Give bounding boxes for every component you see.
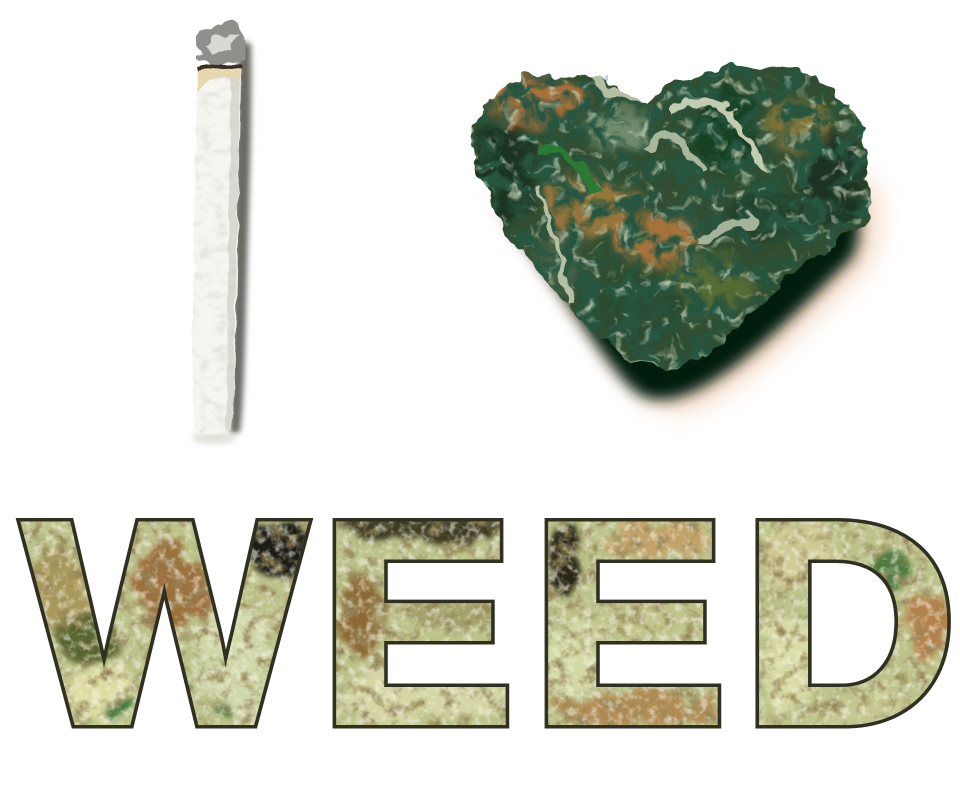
word: WEED filled with bud texture bbox=[16, 518, 951, 728]
word: WEED filled with bud texture: E bbox=[320, 463, 514, 784]
word: WEED filled with bud texture: W bbox=[24, 462, 308, 783]
icon: joint standing in for the letter I bbox=[192, 22, 251, 444]
icon: heart-shaped cannabis bud bbox=[460, 55, 880, 412]
word: WEED filled with bud texture: E bbox=[532, 463, 726, 784]
word: WEED filled with bud texture: D bbox=[742, 462, 957, 783]
